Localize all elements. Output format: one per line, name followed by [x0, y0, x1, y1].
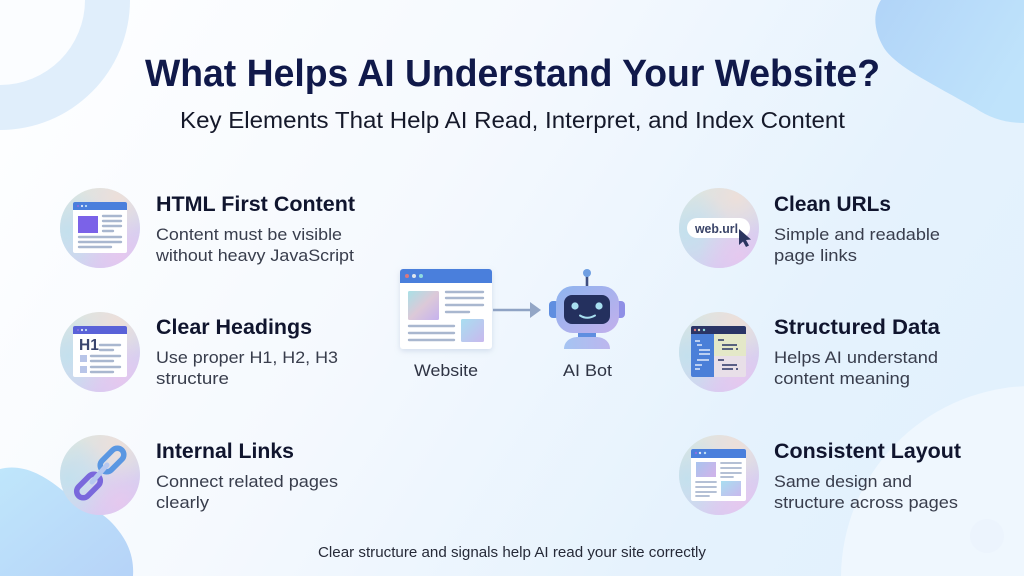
icon: page layout: [679, 435, 759, 515]
central diagram: website to AI bot: [400, 269, 625, 380]
description: Simple and readable: [774, 225, 940, 244]
description: clearly: [156, 493, 210, 512]
panel: Consistent Layout: [679, 435, 961, 515]
arrow: [493, 302, 541, 318]
website illustration: [400, 269, 492, 349]
heading: Clear Headings: [156, 315, 312, 339]
icon: code structure window: [679, 312, 759, 392]
description: Use proper H1, H2, H3: [156, 348, 338, 367]
panel: Internal Links: [60, 435, 338, 515]
heading: Consistent Layout: [774, 439, 961, 463]
icon: page with H1 heading: [60, 312, 140, 392]
description: Same design and: [774, 472, 912, 491]
description: Helps AI understand: [774, 348, 938, 367]
icon: web page with content: [60, 188, 140, 268]
description: structure: [156, 369, 229, 388]
icon: page with H1 heading: H1: [79, 337, 99, 354]
subtitle: Key Elements That Help AI Read, Interpret, and Index Content: [180, 107, 845, 133]
description: Connect related pages: [156, 472, 338, 491]
description: Content must be visible: [156, 225, 342, 244]
icon: URL pill with cursor: web.url: [694, 221, 738, 236]
panel: HTML First Content: [60, 188, 355, 268]
icon: chain links: [60, 435, 140, 515]
panel: Structured Data: [679, 312, 941, 392]
description: page links: [774, 246, 857, 265]
heading: HTML First Content: [156, 192, 355, 216]
description: without heavy JavaScript: [155, 246, 354, 265]
icon: URL pill with cursor: [679, 188, 759, 268]
heading: Structured Data: [774, 315, 941, 339]
label: AI Bot: AI Bot: [563, 361, 612, 380]
description: structure across pages: [774, 493, 958, 512]
heading: Clean URLs: [774, 192, 891, 216]
label: Website: Website: [414, 361, 478, 380]
panel: Clear Headings: [60, 312, 338, 392]
description: content meaning: [774, 369, 910, 388]
title: What Helps AI Understand Your Website?: [145, 53, 880, 95]
footer note: Clear structure and signals help AI read your site correctly: [318, 545, 707, 561]
AI bot illustration: [549, 269, 625, 349]
heading: Internal Links: [156, 439, 294, 463]
panel: Clean URLs: [679, 188, 940, 268]
